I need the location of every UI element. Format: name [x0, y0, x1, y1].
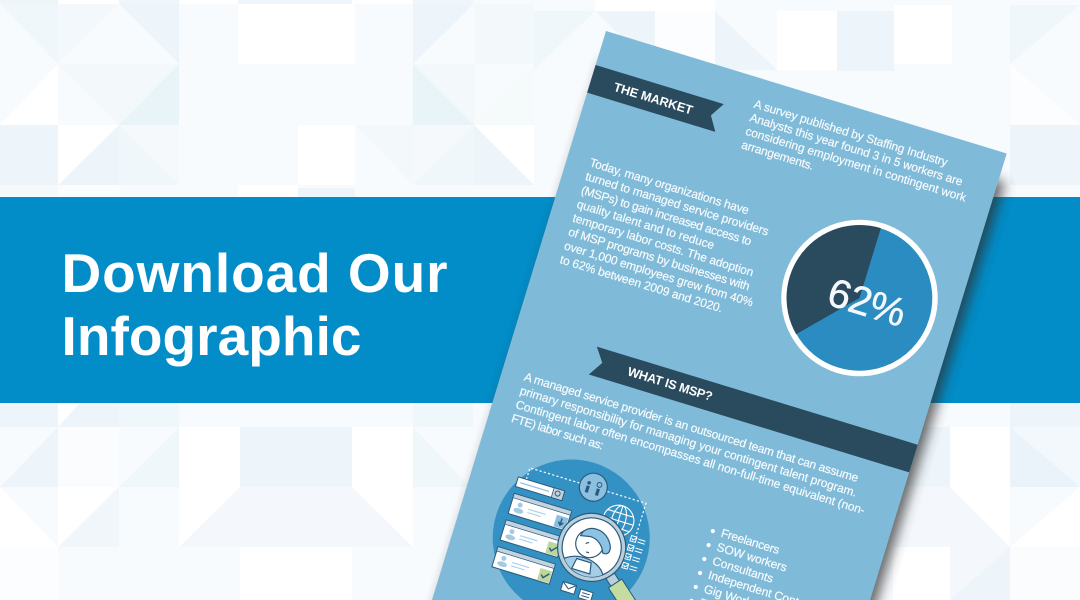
icon: people badge: [576, 470, 611, 505]
text: survey paragraph: arrangements.: [740, 138, 816, 173]
banner: the market: THE MARKET: [612, 80, 695, 118]
bullet list: contingent labor types: [688, 523, 848, 600]
text: MSP adoption paragraph: to 62% between 2009 and 2020.: [558, 252, 725, 315]
illustration backdrop circle: [473, 440, 669, 600]
search bar: [515, 477, 565, 501]
text: MSP adoption paragraph: turned to managed service providers: [584, 169, 770, 238]
title: [62, 242, 448, 367]
text: MSP definition paragraph: Contingent labor often encompasses all non-full-time equivalent (non-: [514, 397, 867, 517]
title: Download Our: [62, 242, 448, 304]
text: MSP adoption paragraph: temporary labor costs. The adoption: [571, 211, 755, 279]
text: survey paragraph: considering employment in contingent work: [744, 124, 969, 205]
bullet list: contingent labor types: Consultants: [711, 554, 775, 586]
banner: what is MSP: WHAT IS MSP?: [626, 365, 714, 404]
text: MSP definition paragraph: A managed service provider is an outsourced team that can assume: [522, 370, 861, 485]
icon: envelopes: [560, 582, 594, 600]
result card 2: [500, 520, 564, 558]
bullet list: contingent labor types: SOW workers: [715, 540, 789, 575]
bullet list: contingent labor types: Freelancers: [719, 526, 781, 557]
banner: what is MSP: [588, 347, 918, 472]
sheet background: [431, 31, 1007, 600]
text: MSP adoption paragraph: quality talent and to reduce: [575, 197, 716, 252]
result card 3: [492, 547, 555, 584]
magnifying glass with candidate: [557, 512, 636, 600]
icon: checklist: [622, 536, 646, 572]
text: MSP adoption paragraph: over 1,000 employees grew from 40%: [563, 239, 755, 310]
text: survey paragraph: [740, 97, 977, 218]
text: survey paragraph: Analysts this year found 3 in 5 workers are: [748, 110, 965, 189]
text: MSP adoption paragraph: Today, many organizations have: [588, 155, 751, 217]
text: MSP adoption paragraph: [558, 155, 781, 323]
title: Infographic: [62, 305, 362, 367]
icon: globe: [599, 501, 638, 540]
text: MSP definition paragraph: FTE) labor such as:: [510, 411, 605, 453]
infographic sheet, rotated: [422, 31, 1013, 600]
text: survey paragraph: A survey published by Staffing Industry: [752, 97, 949, 169]
pie chart: 62%: [765, 204, 954, 392]
text: MSP definition paragraph: primary responsibility for managing your contingent talent program.: [518, 383, 859, 500]
text: MSP adoption paragraph: (MSPs) to gain increased access to: [579, 183, 754, 248]
text: MSP adoption paragraph: of MSP programs by businesses with: [567, 225, 752, 293]
pie chart: 62%: 62%: [823, 271, 911, 336]
result card 1: [508, 493, 572, 531]
blue band: [0, 197, 1080, 403]
dotted connector: [521, 468, 646, 534]
sheet shadow: [428, 60, 1005, 600]
banner: the market: [587, 65, 724, 132]
illustration: candidate search: [491, 460, 650, 600]
